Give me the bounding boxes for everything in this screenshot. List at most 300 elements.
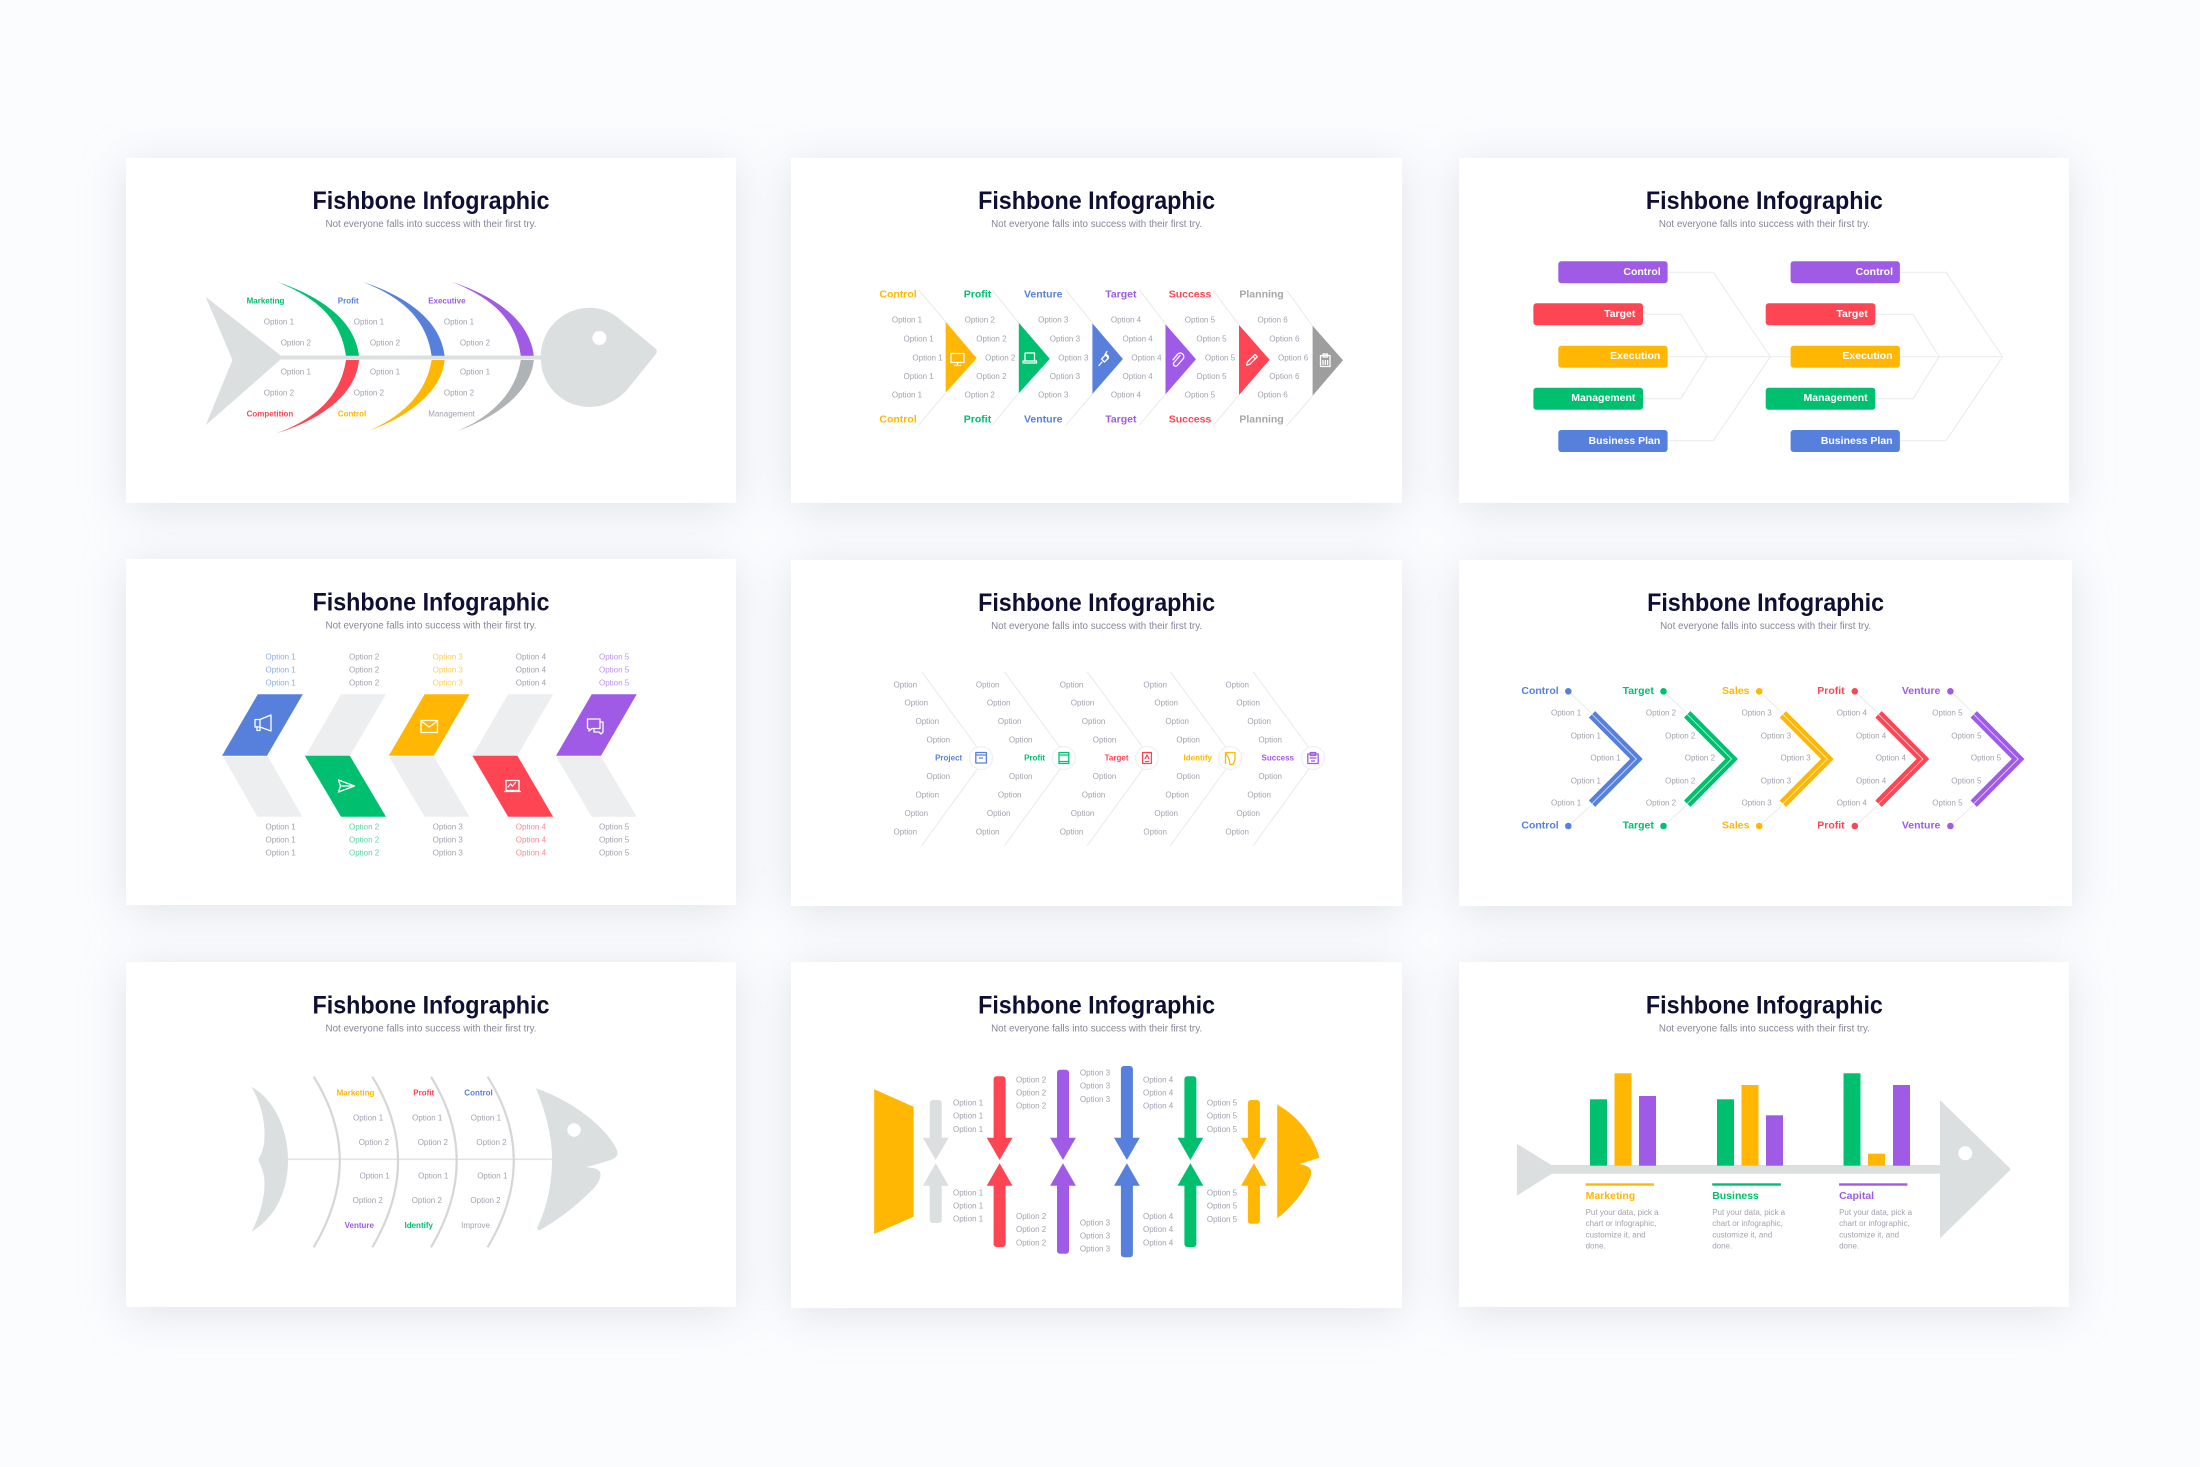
option labels: Option 4 xyxy=(1131,353,1162,362)
text block: marketing: customize it, and xyxy=(1586,1230,1646,1239)
category labels: Target xyxy=(1105,289,1137,301)
upper option labels: Option 3 xyxy=(433,653,463,662)
option labels: Option 2 xyxy=(444,389,475,398)
text block: capital: done. xyxy=(1839,1241,1859,1250)
upper ribs xyxy=(277,282,534,356)
lower option labels: Option 4 xyxy=(516,835,547,844)
title: Fishbone Infographic xyxy=(1646,187,1883,215)
title: Fishbone Infographic xyxy=(978,589,1215,617)
option labels: Option xyxy=(894,680,917,689)
option labels: Option 2 xyxy=(1016,1075,1047,1084)
category labels: Control xyxy=(1521,819,1559,831)
option labels: Option 2 xyxy=(353,1196,383,1205)
option labels: Option 1 xyxy=(953,1188,984,1197)
lower option labels: Option 5 xyxy=(599,835,630,844)
rib labels: Executive xyxy=(428,296,466,305)
option labels: Option 4 xyxy=(1111,315,1142,324)
rib labels: Venture xyxy=(345,1221,374,1230)
option labels: Option 1 xyxy=(953,1125,984,1134)
rib labels: Control xyxy=(464,1088,493,1097)
option labels: Option 5 xyxy=(1196,334,1227,343)
option labels: Option 2 xyxy=(354,389,385,398)
option labels: Option xyxy=(1060,680,1083,689)
panel: arrow fishbone xyxy=(791,962,1402,1308)
option labels: Option xyxy=(916,790,939,799)
connector lines xyxy=(1643,272,2003,441)
option labels: Option 1 xyxy=(892,315,923,324)
option labels: Option 3 xyxy=(1742,799,1772,808)
left bars: Execution xyxy=(1610,350,1660,362)
option labels: Option 1 xyxy=(281,367,311,376)
subtitle: Not everyone falls into success with their first try. xyxy=(991,621,1202,632)
lower option labels: Option 4 xyxy=(516,848,547,857)
category labels: Venture xyxy=(1024,289,1063,301)
upper option labels: Option 1 xyxy=(266,679,296,688)
option labels: Option 1 xyxy=(1590,754,1621,763)
upper option labels: Option 5 xyxy=(599,653,630,662)
option labels: Option 1 xyxy=(360,1171,390,1180)
option labels: Option 5 xyxy=(1185,391,1216,400)
category labels: Profit xyxy=(964,289,992,301)
option labels: Option xyxy=(926,772,950,781)
option labels: Option 3 xyxy=(1761,731,1792,740)
option labels: Option 1 xyxy=(953,1201,984,1210)
option labels xyxy=(353,1113,508,1205)
fish tail xyxy=(874,1089,914,1234)
category labels: Profit xyxy=(1817,819,1845,831)
option labels: Option xyxy=(1247,717,1271,726)
option labels: Option xyxy=(926,735,950,744)
option labels xyxy=(953,1069,1238,1254)
option labels: Option 2 xyxy=(1685,754,1716,763)
option labels: Option 4 xyxy=(1856,776,1887,785)
text block: business xyxy=(1712,1183,1786,1250)
node labels: Success xyxy=(1262,754,1295,763)
category labels xyxy=(879,289,1284,425)
option labels: Option xyxy=(1225,680,1249,689)
option labels: Option 3 xyxy=(1080,1069,1111,1078)
option labels: Option 3 xyxy=(1080,1095,1111,1104)
option labels: Option 2 xyxy=(412,1196,442,1205)
category labels: Venture xyxy=(1902,685,1941,697)
option labels: Option 1 xyxy=(471,1113,502,1122)
option labels: Option xyxy=(1060,827,1083,836)
lower option labels: Option 5 xyxy=(599,822,630,831)
lower blocks xyxy=(223,756,637,817)
option labels: Option 5 xyxy=(1207,1112,1238,1121)
lower option labels: Option 5 xyxy=(599,848,630,857)
left bars: Management xyxy=(1571,392,1636,404)
option labels: Option 3 xyxy=(1038,315,1069,324)
option labels: Option 1 xyxy=(953,1112,984,1121)
category labels: Success xyxy=(1169,289,1211,301)
panel: parallelogram fishbone xyxy=(126,559,736,905)
fish tail xyxy=(251,1087,288,1232)
option labels: Option xyxy=(1154,809,1178,818)
option labels: Option 4 xyxy=(1143,1075,1174,1084)
upper option labels: Option 1 xyxy=(266,653,296,662)
option labels: Option 6 xyxy=(1278,353,1309,362)
subtitle: Not everyone falls into success with their first try. xyxy=(1659,1023,1870,1034)
spine xyxy=(278,356,542,360)
category labels: Sales xyxy=(1722,819,1750,831)
option labels: Option xyxy=(998,790,1021,799)
triangle diagram xyxy=(879,289,1343,426)
option labels: Option xyxy=(1258,735,1282,744)
red arrows xyxy=(987,1076,1012,1247)
option labels xyxy=(264,317,491,398)
block icons xyxy=(255,715,603,792)
option labels: Option 3 xyxy=(1050,372,1081,381)
upper option labels: Option 3 xyxy=(433,666,463,675)
upper option labels: Option 2 xyxy=(349,653,380,662)
option labels: Option 5 xyxy=(1951,731,1982,740)
option labels: Option 4 xyxy=(1143,1088,1174,1097)
text block: marketing: Put your data, pick a xyxy=(1586,1208,1659,1217)
title: Fishbone Infographic xyxy=(312,588,550,616)
option labels: Option 2 xyxy=(976,372,1007,381)
option labels: Option 2 xyxy=(264,389,295,398)
fish head xyxy=(1940,1100,2011,1238)
option labels: Option 2 xyxy=(281,338,311,347)
option labels: Option 2 xyxy=(359,1138,389,1147)
bar chart: marketing xyxy=(1590,1073,1656,1166)
option labels: Option 2 xyxy=(1665,776,1696,785)
upper option labels xyxy=(266,653,630,688)
option labels: Option 2 xyxy=(1016,1212,1047,1221)
right bars: Target xyxy=(1836,308,1868,320)
option labels: Option 1 xyxy=(354,317,385,326)
option labels: Option 4 xyxy=(1143,1212,1174,1221)
option labels: Option xyxy=(987,699,1010,708)
option labels: Option xyxy=(1093,735,1116,744)
node labels: Target xyxy=(1105,754,1129,763)
option labels: Option xyxy=(1258,772,1282,781)
category labels: Venture xyxy=(1024,413,1063,425)
yellow arrows xyxy=(1241,1100,1267,1224)
panel: triangle fishbone xyxy=(791,158,1402,503)
left bars: Target xyxy=(1604,308,1636,320)
option labels: Option xyxy=(998,717,1021,726)
category labels: Venture xyxy=(1902,819,1941,831)
category labels: Control xyxy=(1521,685,1559,697)
text block: business: customize it, and xyxy=(1712,1230,1772,1239)
connector lines xyxy=(919,290,1313,426)
option labels: Option 5 xyxy=(1207,1215,1238,1224)
bar chart: business xyxy=(1717,1085,1783,1166)
category labels: Profit xyxy=(964,413,992,425)
text block: business: done. xyxy=(1712,1241,1732,1250)
option labels: Option xyxy=(987,809,1010,818)
category labels: Planning xyxy=(1239,289,1284,301)
option labels: Option 3 xyxy=(1761,776,1792,785)
option labels: Option xyxy=(1143,827,1167,836)
upper option labels: Option 1 xyxy=(266,666,296,675)
lower option labels: Option 2 xyxy=(349,835,380,844)
rib labels: Profit xyxy=(338,296,359,305)
option labels: Option 4 xyxy=(1856,731,1887,740)
lower option labels: Option 2 xyxy=(349,848,380,857)
right bars xyxy=(1766,261,1900,452)
option labels: Option xyxy=(904,699,928,708)
text block: business: Put your data, pick a xyxy=(1712,1208,1786,1217)
panel: curved fishbone xyxy=(126,158,736,503)
text block: business: chart or infographic, xyxy=(1712,1219,1783,1228)
option labels: Option 1 xyxy=(953,1215,984,1224)
node labels: Profit xyxy=(1024,754,1045,763)
node labels: Project xyxy=(935,754,963,763)
option labels: Option 3 xyxy=(1780,754,1811,763)
upper option labels: Option 4 xyxy=(516,653,547,662)
option labels: Option 3 xyxy=(1058,353,1089,362)
option labels: Option 1 xyxy=(912,353,943,362)
option labels: Option 6 xyxy=(1269,372,1300,381)
option labels: Option 4 xyxy=(1143,1102,1174,1111)
title: Fishbone Infographic xyxy=(312,991,550,1019)
category labels: Sales xyxy=(1722,685,1750,697)
node diagram xyxy=(894,672,1324,846)
text block: business: Business xyxy=(1712,1190,1759,1202)
fish head xyxy=(541,308,657,407)
fish diagram xyxy=(206,282,657,433)
option labels: Option 2 xyxy=(1016,1238,1047,1247)
green arrows xyxy=(1178,1076,1203,1247)
panel: circle node fishbone xyxy=(791,560,1402,906)
parallelogram diagram xyxy=(222,653,637,857)
option labels: Option 3 xyxy=(1080,1232,1111,1241)
option labels: Option 2 xyxy=(1016,1225,1047,1234)
option labels xyxy=(1551,709,2002,808)
chart diagram xyxy=(1517,1073,2011,1250)
option labels: Option xyxy=(1009,772,1032,781)
option labels: Option 2 xyxy=(1016,1102,1047,1111)
option labels: Option 5 xyxy=(1207,1202,1238,1211)
option labels: Option 4 xyxy=(1122,334,1153,343)
lower option labels: Option 3 xyxy=(433,848,463,857)
panel: chevron fishbone xyxy=(1459,560,2072,906)
purple arrows xyxy=(1050,1070,1076,1254)
option labels: Option 1 xyxy=(904,334,934,343)
fish tail xyxy=(1517,1144,1553,1196)
lower option labels: Option 1 xyxy=(266,822,296,831)
lower option labels: Option 3 xyxy=(433,822,463,831)
node circles xyxy=(970,746,1324,770)
subtitle: Not everyone falls into success with their first try. xyxy=(326,620,536,631)
subtitle: Not everyone falls into success with their first try. xyxy=(326,1023,536,1034)
option labels: Option 6 xyxy=(1258,315,1288,324)
category labels: Control xyxy=(879,413,917,425)
option labels: Option 3 xyxy=(1050,334,1081,343)
panel: bar chart fishbone xyxy=(1459,962,2069,1307)
text block: capital: customize it, and xyxy=(1839,1230,1899,1239)
left bars: Control xyxy=(1623,266,1661,278)
option labels: Option xyxy=(1093,772,1116,781)
connector lines xyxy=(922,672,1309,846)
title: Fishbone Infographic xyxy=(312,187,550,215)
option labels: Option 4 xyxy=(1837,799,1867,808)
option labels: Option 2 xyxy=(965,391,995,400)
rib labels: Improve xyxy=(461,1221,491,1230)
category labels xyxy=(1521,685,1941,831)
lower option labels: Option 2 xyxy=(349,822,380,831)
option labels: Option 1 xyxy=(904,372,934,381)
option labels: Option 2 xyxy=(1016,1088,1047,1097)
subtitle: Not everyone falls into success with their first try. xyxy=(1659,219,1870,230)
option labels: Option 1 xyxy=(1551,709,1582,718)
lower ribs xyxy=(277,360,534,433)
category labels: Target xyxy=(1105,413,1137,425)
lower option labels: Option 4 xyxy=(516,822,547,831)
category labels: Target xyxy=(1623,819,1654,831)
panel: label bars fishbone xyxy=(1459,158,2069,503)
subtitle: Not everyone falls into success with their first try. xyxy=(1660,621,1871,632)
category labels: Profit xyxy=(1817,685,1845,697)
upper option labels: Option 5 xyxy=(599,666,630,675)
rib labels: Control xyxy=(338,410,366,419)
option labels: Option 2 xyxy=(418,1138,448,1147)
option labels: Option 2 xyxy=(370,338,401,347)
option labels: Option 2 xyxy=(1646,709,1677,718)
text block: marketing: done. xyxy=(1586,1241,1606,1250)
option labels: Option xyxy=(1082,790,1105,799)
gray arrows xyxy=(923,1100,949,1223)
rib labels xyxy=(247,296,476,419)
option labels: Option 2 xyxy=(460,338,491,347)
option labels: Option 5 xyxy=(1951,776,1982,785)
connector lines and dots xyxy=(1565,688,1972,829)
option labels: Option xyxy=(976,680,999,689)
option labels: Option xyxy=(1154,699,1178,708)
lower option labels: Option 1 xyxy=(266,835,296,844)
right bars: Business Plan xyxy=(1821,435,1893,447)
option labels: Option 2 xyxy=(965,315,995,324)
option labels: Option 5 xyxy=(1207,1125,1238,1134)
option labels: Option 4 xyxy=(1122,372,1153,381)
node labels: Identify xyxy=(1184,754,1213,763)
category labels: Control xyxy=(879,289,917,301)
option labels: Option 1 xyxy=(1551,799,1582,808)
option labels: Option 1 xyxy=(477,1171,508,1180)
left bars: Business Plan xyxy=(1589,435,1660,447)
bars diagram xyxy=(1533,261,2003,452)
option labels: Option xyxy=(1009,735,1032,744)
option labels: Option 2 xyxy=(985,353,1016,362)
node labels xyxy=(935,754,1295,763)
option labels: Option 5 xyxy=(1932,799,1963,808)
option labels: Option 2 xyxy=(476,1138,507,1147)
option labels: Option 1 xyxy=(892,391,923,400)
option labels: Option 4 xyxy=(1837,709,1867,718)
option labels: Option 1 xyxy=(412,1113,443,1122)
upper option labels: Option 2 xyxy=(349,666,380,675)
ribs xyxy=(314,1077,514,1247)
option labels: Option 5 xyxy=(1971,754,2002,763)
spine xyxy=(286,1158,554,1160)
option labels: Option xyxy=(1165,717,1189,726)
title: Fishbone Infographic xyxy=(1646,991,1883,1019)
option labels: Option xyxy=(904,809,928,818)
chevron diagram xyxy=(1521,685,2018,831)
rib labels: Management xyxy=(428,410,476,419)
subtitle: Not everyone falls into success with their first try. xyxy=(991,1023,1202,1034)
subtitle: Not everyone falls into success with their first try. xyxy=(991,219,1202,230)
text block: capital: Put your data, pick a xyxy=(1839,1208,1913,1217)
lower option labels: Option 3 xyxy=(433,835,463,844)
text block: capital: Capital xyxy=(1839,1190,1874,1202)
option labels: Option 4 xyxy=(1143,1225,1174,1234)
option labels: Option 3 xyxy=(1742,709,1772,718)
category labels: Success xyxy=(1169,413,1211,425)
option labels: Option 2 xyxy=(470,1196,501,1205)
blue arrows xyxy=(1114,1066,1140,1257)
rib labels: Profit xyxy=(413,1088,435,1097)
option labels: Option 1 xyxy=(264,317,295,326)
rib labels: Identify xyxy=(404,1221,433,1230)
text block: capital xyxy=(1839,1183,1913,1250)
option labels: Option 4 xyxy=(1143,1238,1174,1247)
option labels: Option xyxy=(1236,809,1260,818)
fish diagram xyxy=(251,1077,618,1247)
fish spine xyxy=(1551,1165,1941,1174)
option labels: Option xyxy=(1143,680,1167,689)
option labels: Option 5 xyxy=(1185,315,1216,324)
upper option labels: Option 2 xyxy=(349,679,380,688)
option labels xyxy=(894,680,1282,836)
text block: capital: chart or infographic, xyxy=(1839,1219,1910,1228)
upper option labels: Option 5 xyxy=(599,679,630,688)
title: Fishbone Infographic xyxy=(1647,589,1884,617)
option labels: Option 1 xyxy=(1571,731,1601,740)
fish tail xyxy=(206,297,280,425)
text block: marketing: Marketing xyxy=(1586,1190,1635,1202)
upper option labels: Option 3 xyxy=(433,679,463,688)
option labels: Option 3 xyxy=(1080,1082,1111,1091)
option labels: Option 4 xyxy=(1111,391,1142,400)
option labels: Option 1 xyxy=(1571,776,1601,785)
option labels: Option xyxy=(1225,827,1249,836)
option labels: Option 5 xyxy=(1205,353,1236,362)
lower option labels xyxy=(266,822,630,857)
option labels xyxy=(892,315,1309,400)
option labels: Option 1 xyxy=(353,1113,384,1122)
option labels: Option xyxy=(1071,699,1094,708)
option labels: Option xyxy=(976,827,999,836)
upper blocks xyxy=(222,694,637,756)
right bars: Management xyxy=(1804,392,1868,404)
option labels: Option 1 xyxy=(370,367,401,376)
subtitle: Not everyone falls into success with their first try. xyxy=(326,219,536,230)
option labels: Option xyxy=(1082,717,1105,726)
option labels: Option 3 xyxy=(1080,1245,1111,1254)
option labels: Option 1 xyxy=(460,367,491,376)
right bars: Control xyxy=(1856,266,1893,278)
option labels: Option xyxy=(1176,772,1200,781)
option labels: Option xyxy=(894,827,917,836)
upper option labels: Option 4 xyxy=(516,666,547,675)
rib labels xyxy=(337,1088,493,1230)
triangle icons xyxy=(951,352,1330,366)
text block: marketing xyxy=(1586,1183,1659,1250)
option labels: Option 1 xyxy=(418,1171,449,1180)
option labels: Option 1 xyxy=(953,1099,984,1108)
option labels: Option xyxy=(916,717,939,726)
title: Fishbone Infographic xyxy=(978,991,1215,1019)
option labels: Option 6 xyxy=(1269,334,1300,343)
fish head xyxy=(1277,1105,1319,1218)
option labels: Option 2 xyxy=(1665,731,1696,740)
rib labels: Competition xyxy=(247,410,293,419)
option labels: Option xyxy=(1236,699,1260,708)
